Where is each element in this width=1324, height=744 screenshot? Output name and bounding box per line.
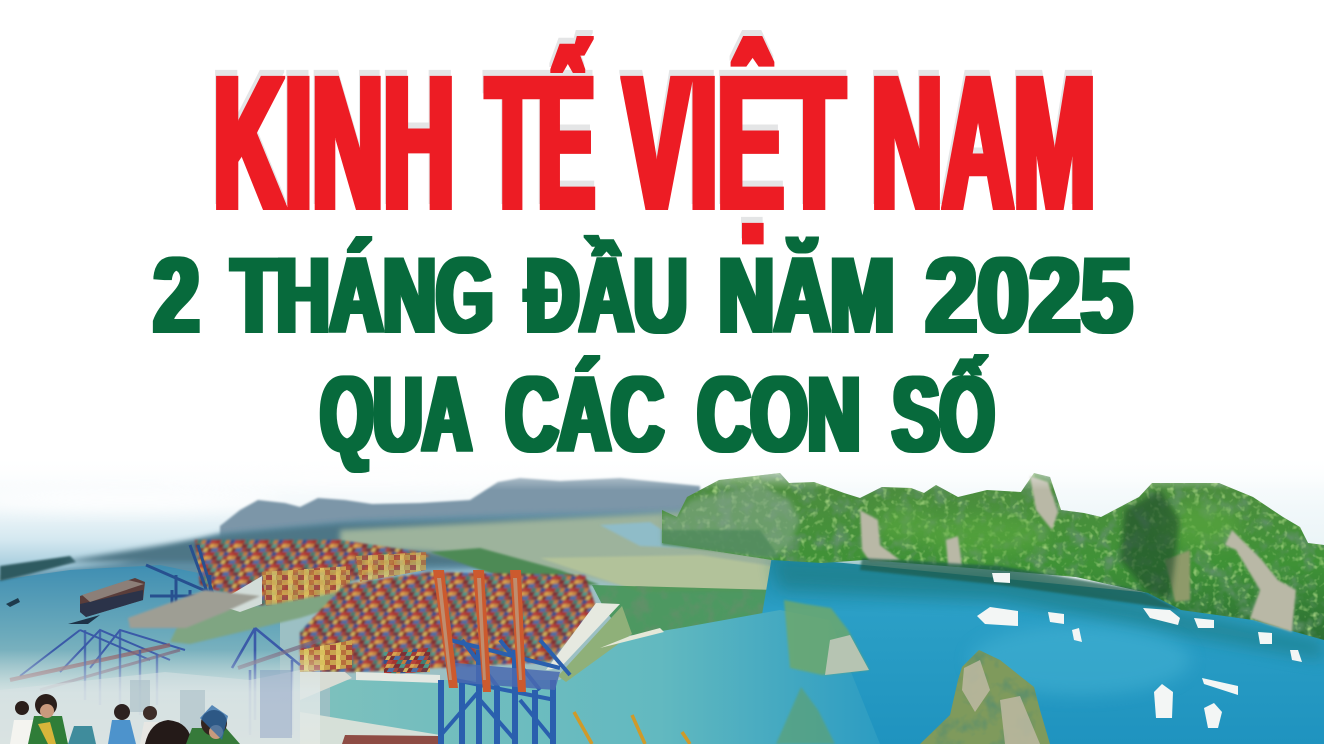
quay	[128, 590, 260, 628]
title shadow: NAM	[870, 29, 1094, 244]
tugboat	[6, 598, 20, 607]
subtitle: 2 THÁNG ĐẦU NĂM 2025: 2	[154, 235, 200, 355]
top fade over photo	[0, 455, 1324, 490]
karst mountain range	[662, 473, 1324, 640]
base ground tone	[0, 575, 900, 744]
bright foliage patches	[875, 503, 1240, 555]
left harbor water	[0, 565, 280, 700]
title red text: KINH	[214, 35, 454, 250]
title red text: TẾ	[486, 35, 594, 250]
subtitle: 2 THÁNG ĐẦU NĂM 2025: ĐẦU	[526, 235, 688, 355]
subtitle: 2 THÁNG ĐẦU NĂM 2025	[154, 235, 1132, 355]
faded lower islet	[776, 687, 835, 744]
right sea	[740, 556, 1324, 744]
left cranes	[10, 628, 320, 735]
title red text	[214, 35, 1096, 250]
title shadow: TẾ	[486, 29, 594, 244]
marshland	[340, 512, 790, 636]
subtitle: QUA CÁC CON SỐ	[320, 354, 994, 474]
subtitle: 2 THÁNG ĐẦU NĂM 2025: NĂM	[718, 235, 894, 355]
front islet	[920, 650, 1050, 744]
workers photo	[0, 650, 320, 744]
container ship	[68, 578, 145, 624]
sky	[0, 455, 1324, 580]
subtitle: QUA CÁC CON SỐ: SỐ	[892, 354, 994, 474]
distant mountains	[0, 478, 700, 590]
main container yard	[300, 572, 664, 700]
karst reflection on water	[772, 558, 1324, 660]
far cranes	[146, 545, 214, 620]
cruise boats	[977, 573, 1302, 728]
back container terminal	[170, 540, 430, 644]
title shadow	[212, 29, 1094, 244]
photo collage: port and Ha Long Bay	[0, 455, 1324, 744]
title shadow: VIỆT	[622, 29, 844, 244]
coastal strip	[0, 556, 76, 581]
subtitle: QUA CÁC CON SỐ: CÁC	[506, 354, 664, 474]
middle islet	[784, 600, 869, 675]
far port and town	[60, 516, 700, 566]
bottom quay with containers	[300, 712, 440, 744]
subtitle: 2 THÁNG ĐẦU NĂM 2025: 2025	[926, 235, 1132, 355]
title shadow: KINH	[212, 29, 454, 244]
subtitle: QUA CÁC CON SỐ: QUA	[320, 354, 472, 474]
orange gantry cranes and blue legs	[433, 570, 570, 744]
subtitle: 2 THÁNG ĐẦU NĂM 2025: THÁNG	[232, 235, 494, 355]
teal bay	[330, 610, 880, 744]
rock faces	[860, 476, 1296, 632]
subtitle: QUA CÁC CON SỐ: CON	[698, 354, 860, 474]
sea highlight	[970, 625, 1190, 695]
title red text: VIỆT	[624, 35, 844, 250]
worker figures	[10, 694, 240, 744]
title red text: NAM	[872, 35, 1096, 250]
yellow harbor cranes	[574, 712, 690, 744]
title: KINH TẾ VIỆT NAM	[212, 29, 1096, 250]
